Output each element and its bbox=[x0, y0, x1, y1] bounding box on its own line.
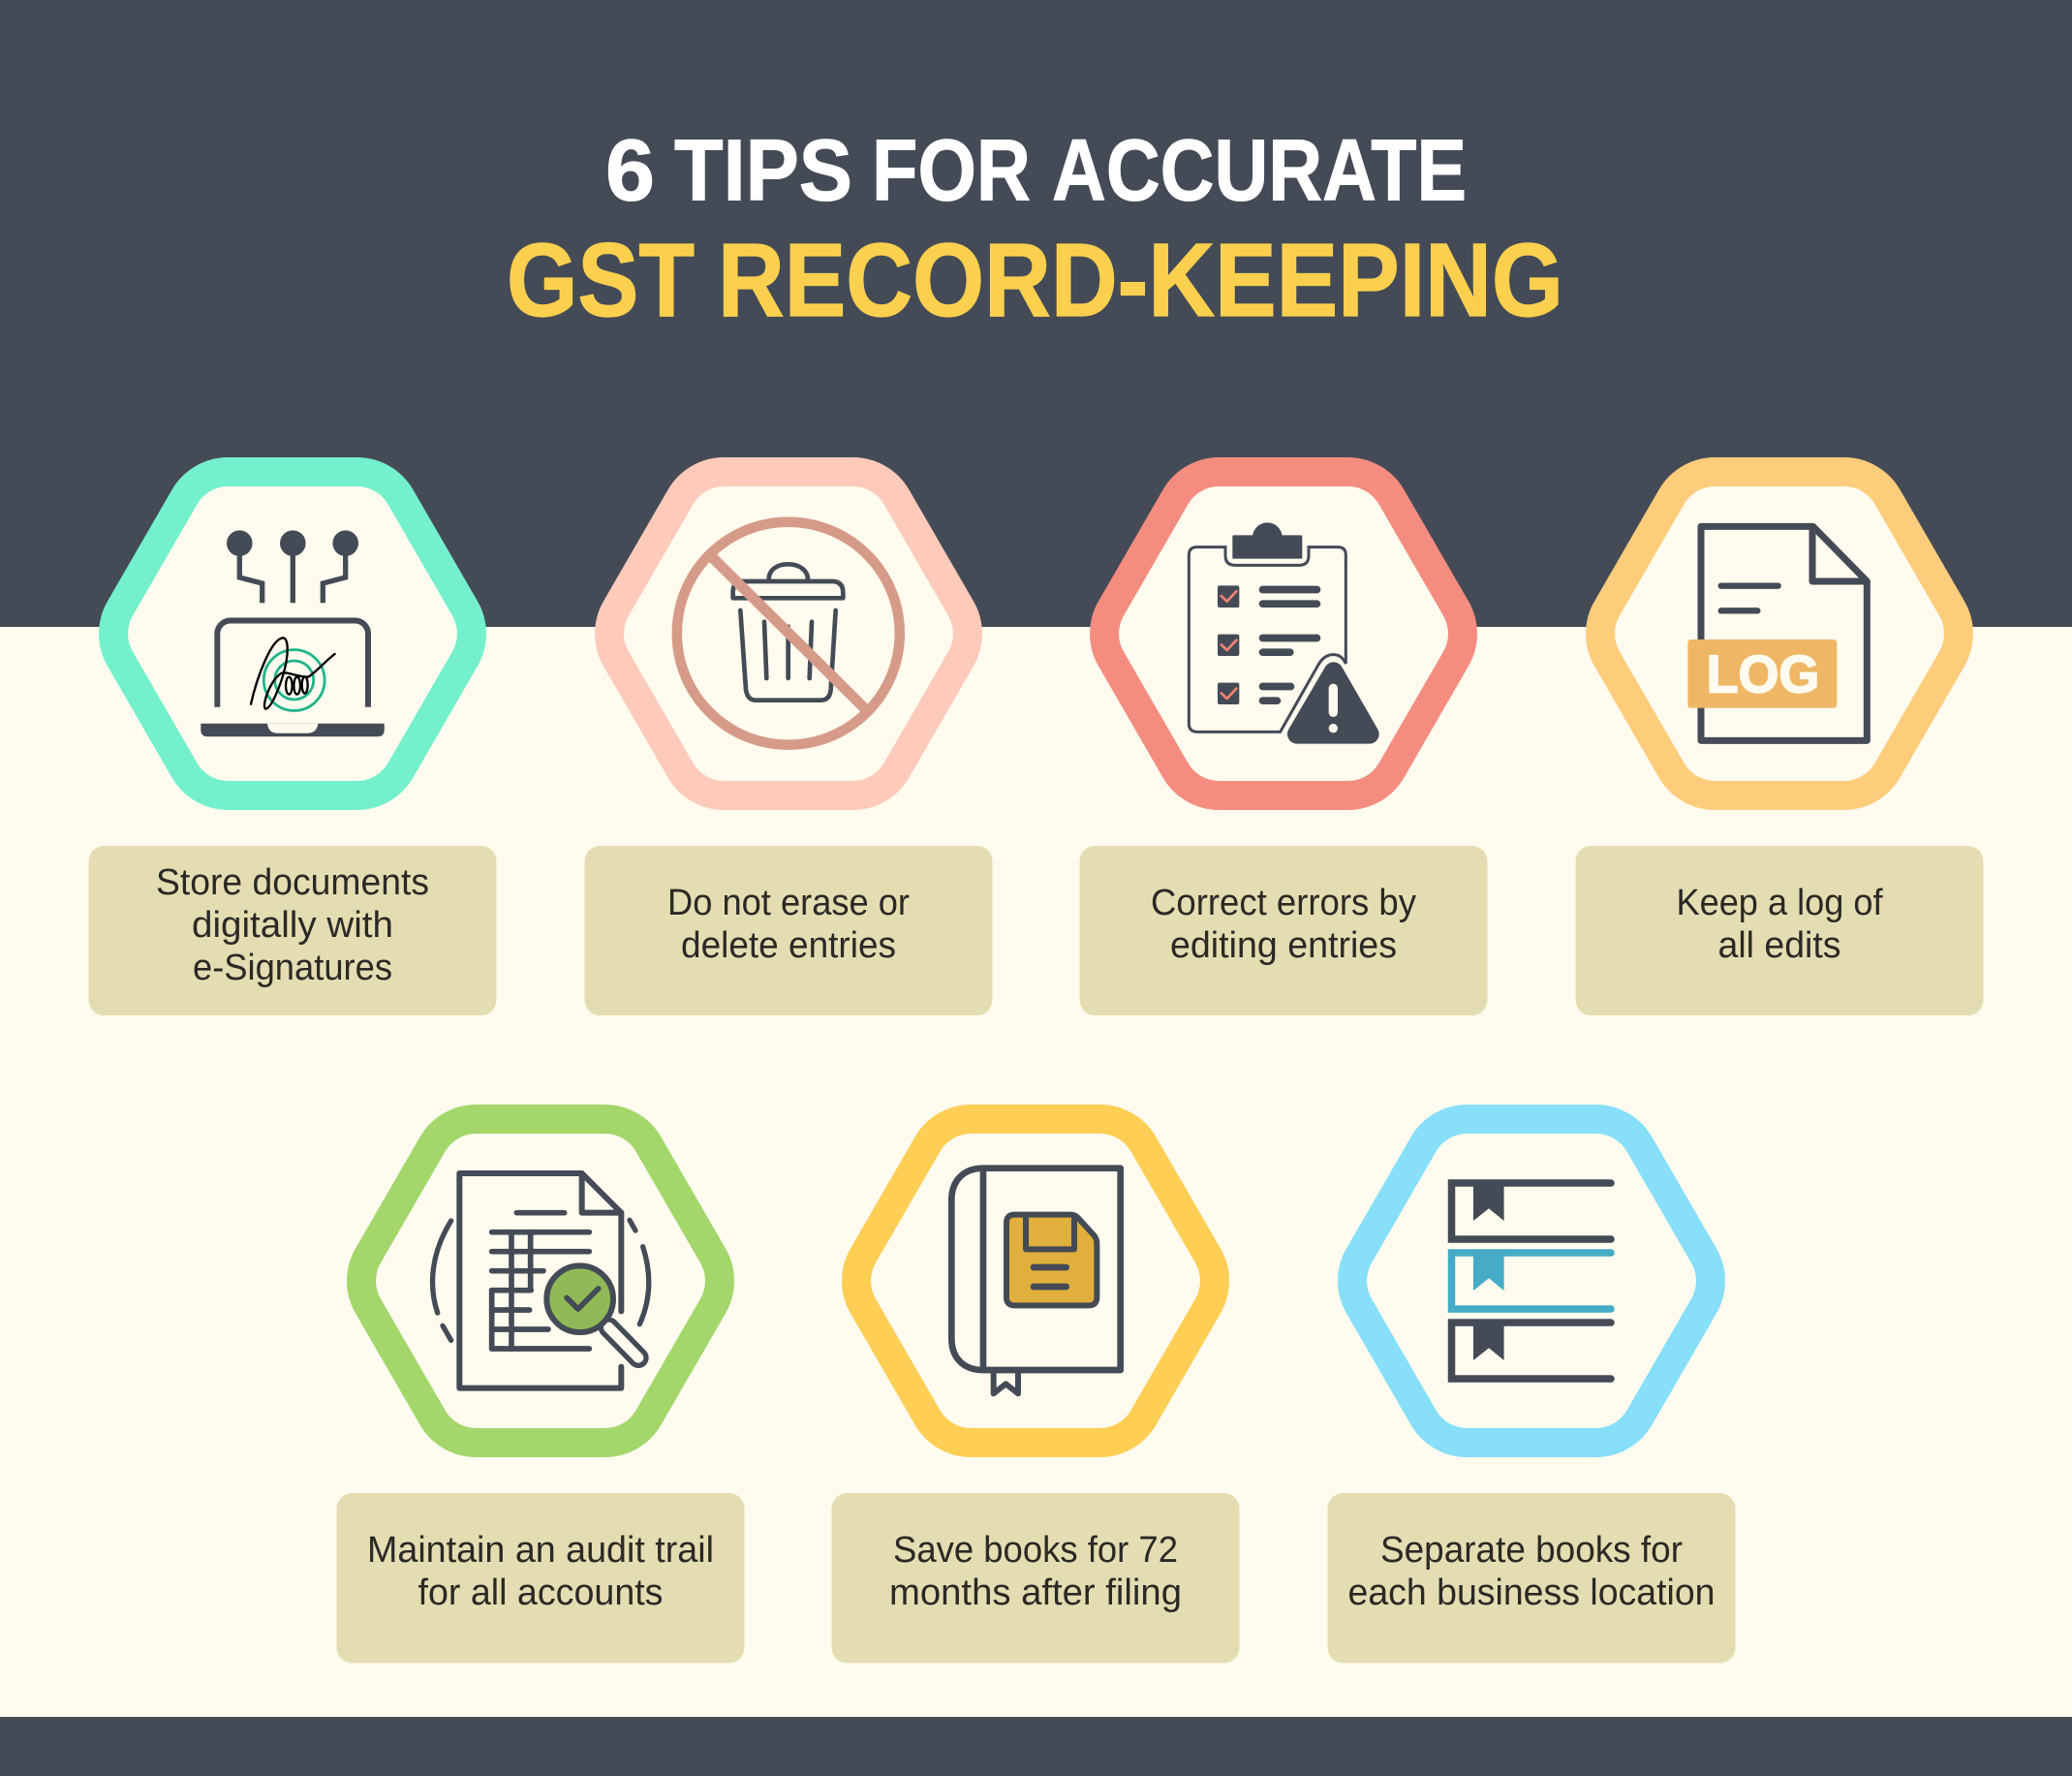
footer band bbox=[0, 1717, 2072, 1776]
label box bbox=[1327, 1493, 1736, 1663]
icon: book with floppy disk bbox=[951, 1168, 1121, 1393]
hexagon: blue bbox=[1352, 1119, 1711, 1443]
label box bbox=[89, 846, 496, 1015]
label text bbox=[667, 883, 910, 966]
label text: Save books for 72 bbox=[893, 1530, 1178, 1571]
title line 2: GST bbox=[507, 221, 695, 338]
icon: clipboard with warning bbox=[1189, 522, 1370, 734]
icon: log document: LOG bbox=[1707, 643, 1819, 703]
label text: Correct errors by bbox=[1151, 883, 1416, 923]
icon: crossed out trash can bbox=[677, 522, 900, 745]
panel: store documents digitally bbox=[89, 472, 496, 1015]
label text: Separate books for bbox=[1380, 1530, 1683, 1571]
title line 1: FOR bbox=[872, 122, 1031, 219]
hexagon: mint bbox=[113, 472, 472, 795]
hexagon: yellow bbox=[856, 1119, 1215, 1443]
book three bbox=[1451, 1323, 1611, 1379]
label text bbox=[889, 1530, 1182, 1613]
icon: stacked books bbox=[1451, 1183, 1611, 1379]
hexagon: orange bbox=[1600, 472, 1959, 795]
label text: for all accounts bbox=[418, 1573, 663, 1613]
label text: Do not erase or bbox=[667, 883, 910, 923]
hexagon: green bbox=[361, 1119, 720, 1443]
panel: separate books bbox=[1327, 1119, 1736, 1663]
icon: log document bbox=[1687, 526, 1867, 740]
icon: document with magnifier bbox=[433, 1173, 649, 1388]
panel: correct errors bbox=[1079, 472, 1488, 1015]
hexagon: pink bbox=[609, 472, 968, 795]
label text: Maintain an audit trail bbox=[367, 1530, 714, 1571]
panel: do not erase bbox=[585, 472, 992, 1015]
label text: months after filing bbox=[889, 1573, 1182, 1613]
label box bbox=[1575, 846, 1984, 1015]
label text bbox=[367, 1530, 714, 1613]
panel: keep a log bbox=[1575, 472, 1984, 1015]
title line 1: TIPS bbox=[674, 122, 852, 219]
label box bbox=[337, 1493, 744, 1663]
label text: Store documents bbox=[156, 862, 429, 903]
label box bbox=[831, 1493, 1240, 1663]
icon: floppy disk bbox=[1006, 1215, 1097, 1305]
label box bbox=[1079, 846, 1488, 1015]
label text: editing entries bbox=[1170, 925, 1397, 966]
icon: laptop with e-signature bbox=[201, 530, 385, 736]
title line 1 bbox=[605, 122, 1467, 219]
label box bbox=[585, 846, 992, 1015]
label text bbox=[1151, 883, 1416, 966]
title line 2: RECORD-KEEPING bbox=[718, 221, 1563, 338]
label text bbox=[1676, 883, 1883, 966]
panel: audit trail bbox=[337, 1119, 744, 1663]
header band bbox=[0, 0, 2072, 627]
title line 1: 6 bbox=[605, 122, 655, 219]
label text bbox=[156, 862, 429, 988]
book one bbox=[1451, 1183, 1611, 1239]
title bbox=[507, 122, 1563, 338]
panel: save books bbox=[831, 1119, 1240, 1663]
label text: e-Signatures bbox=[193, 948, 392, 988]
label text: all edits bbox=[1718, 925, 1840, 966]
label text: delete entries bbox=[681, 925, 896, 966]
book two bbox=[1451, 1253, 1611, 1309]
title line 1: ACCURATE bbox=[1052, 122, 1467, 219]
label text: digitally with bbox=[192, 905, 393, 946]
label text: each business location bbox=[1348, 1573, 1715, 1613]
label text bbox=[1348, 1530, 1715, 1613]
hexagon: salmon bbox=[1104, 472, 1463, 795]
label text: Keep a log of bbox=[1676, 883, 1883, 923]
